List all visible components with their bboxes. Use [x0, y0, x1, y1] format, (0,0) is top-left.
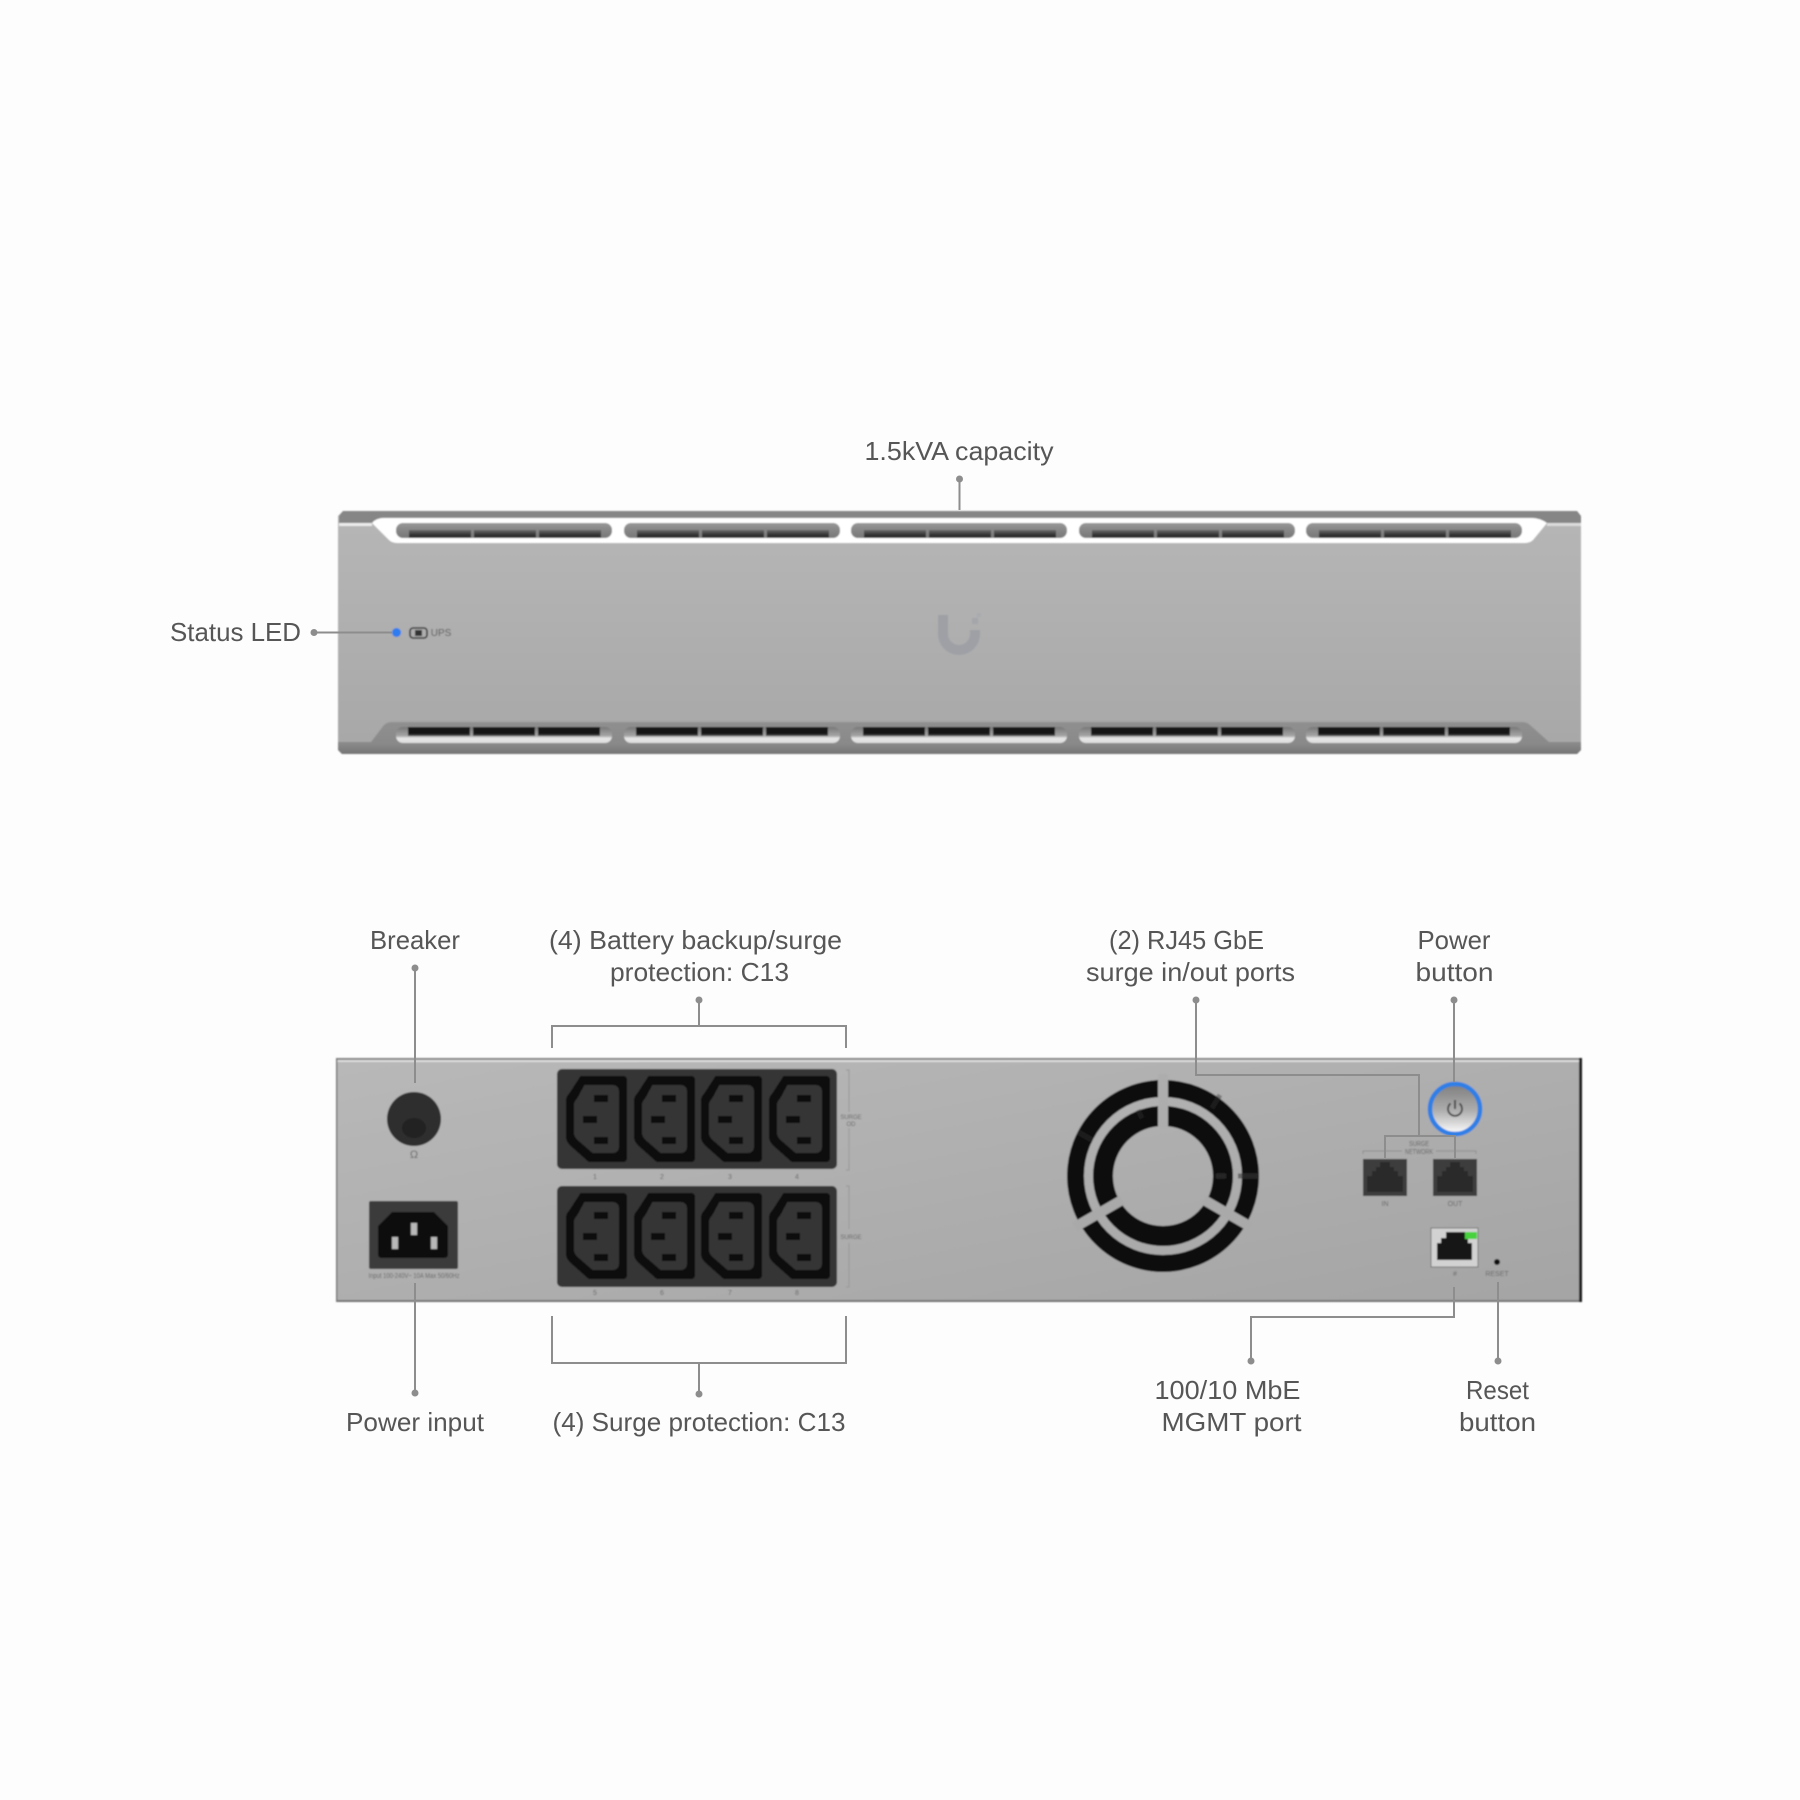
icon: U logo [943, 613, 981, 650]
top vents [396, 523, 1522, 538]
top outlet block [557, 1069, 862, 1181]
bottom vents [396, 727, 1522, 743]
reset button: RESET [1485, 1271, 1509, 1278]
reset button [1485, 1259, 1509, 1278]
top outlet block: 1 [593, 1174, 597, 1181]
fan grille [1075, 1074, 1258, 1264]
breaker [387, 1092, 441, 1161]
callout: 1.5kVA capacity: 1.5kVA capacity [864, 436, 1054, 466]
power input socket: Input 100-240V~ 10A Max 50/60Hz [368, 1273, 460, 1280]
callout: surge protection outlets [552, 1316, 846, 1437]
panel: rear of UPS [336, 1058, 1582, 1302]
rear chassis body [336, 1058, 1582, 1302]
MGMT port [1431, 1228, 1478, 1278]
callout: battery backup outlets: protection: C13 [610, 957, 789, 987]
top outlet block: 3 [728, 1174, 732, 1181]
RJ45 in port: IN [1382, 1201, 1388, 1208]
callout: RJ45 surge ports: (2) RJ45 GbE [1109, 925, 1264, 955]
bottom outlet block: 6 [660, 1290, 664, 1297]
breaker: Ω [410, 1149, 418, 1161]
callout: Power button: button [1416, 957, 1494, 987]
callout: Reset button [1459, 1282, 1536, 1437]
power input socket [368, 1201, 460, 1280]
callout: Power input [346, 1283, 485, 1437]
bottom outlet block: 7 [728, 1290, 732, 1297]
top dark edge [339, 511, 1581, 524]
callout: MGMT port: 100/10 MbE [1154, 1375, 1300, 1405]
callout: Power button: Power [1418, 925, 1491, 955]
status LED group [392, 628, 452, 639]
callout: Status LED: Status LED [170, 617, 301, 647]
top outlet block: 2 [660, 1174, 664, 1181]
callout: battery backup outlets: (4) Battery backup/surge [549, 925, 842, 955]
bottom outlet block [557, 1186, 862, 1297]
callout: battery backup outlets [549, 925, 846, 1048]
bottom outlet block: 5 [593, 1290, 597, 1297]
status LED group: UPS [431, 628, 452, 639]
top outlet block: OD [846, 1122, 856, 1128]
top outlet block: SURGE [840, 1115, 862, 1121]
callout: MGMT port: MGMT port [1162, 1407, 1302, 1437]
top white vent channel [372, 518, 1547, 543]
callout: MGMT port [1154, 1287, 1454, 1437]
callout: surge protection outlets: (4) Surge protection: C13 [552, 1407, 846, 1437]
front chassis body [338, 511, 1581, 754]
surge network label: NETWORK [1405, 1149, 1433, 1156]
callout: Breaker: Breaker [370, 925, 460, 955]
RJ45 out port [1433, 1159, 1477, 1208]
callout: Power button [1416, 925, 1494, 1082]
bottom outlet block: 8 [795, 1290, 799, 1297]
callout: RJ45 surge ports [1086, 925, 1455, 1158]
power button [1430, 1084, 1480, 1134]
rear edges [336, 1058, 1582, 1302]
callout: Status LED [170, 617, 392, 647]
callout: Reset button: Reset [1466, 1375, 1530, 1405]
callout: Power input: Power input [346, 1407, 485, 1437]
RJ45 in port [1363, 1159, 1407, 1208]
top outlet block: 4 [795, 1174, 799, 1181]
callout: Reset button: button [1459, 1407, 1536, 1437]
surge network label [1363, 1141, 1476, 1156]
MGMT port: # [1453, 1271, 1457, 1278]
surge network label: SURGE [1409, 1141, 1429, 1148]
bottom outlet block: SURGE [840, 1235, 862, 1241]
corner highlights [339, 523, 1581, 526]
callout: 1.5kVA capacity [864, 436, 1054, 510]
callout: Breaker [370, 925, 460, 1083]
bottom dark band [338, 722, 1581, 754]
panel: front of UPS [338, 511, 1581, 754]
RJ45 out port: OUT [1448, 1201, 1463, 1208]
callout: RJ45 surge ports: surge in/out ports [1086, 957, 1295, 987]
